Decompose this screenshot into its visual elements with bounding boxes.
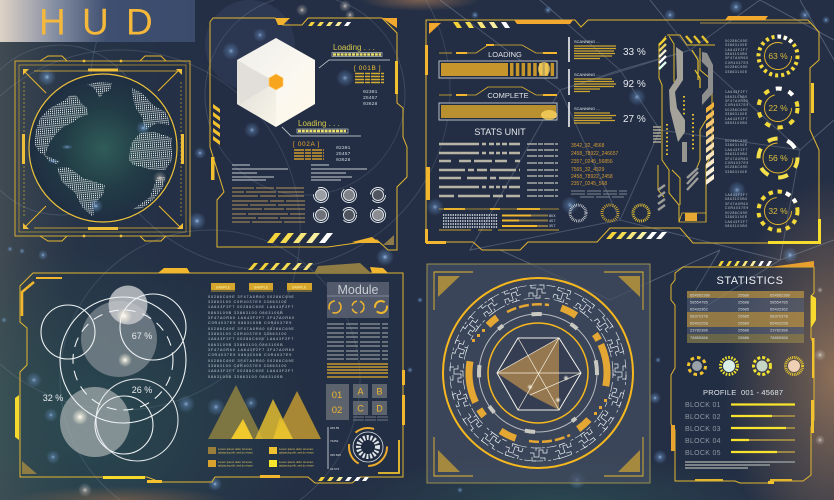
panel: globe	[15, 56, 190, 241]
code tiles	[326, 384, 388, 420]
table: 58372378	[770, 314, 789, 318]
gauge number columns: 00286C69E	[725, 65, 748, 69]
code list: 2357_0245_56856	[571, 159, 613, 165]
loading block bottom: [ 002A ]	[293, 141, 320, 148]
radial gauge: 345.55	[330, 426, 340, 430]
sample columns: 3F47A0R60 1A643F2F7 3F47A0R60	[208, 348, 295, 352]
scanning column: 33 %	[623, 47, 646, 58]
gauge 22%: 22 %	[768, 103, 788, 113]
title banner: HUD	[0, 0, 195, 42]
module box: Module	[338, 283, 379, 297]
gauge 63%: 63 %	[768, 51, 788, 61]
corner brackets	[434, 272, 643, 476]
table: 78855366	[770, 335, 789, 340]
code tiles: C	[357, 404, 364, 414]
small rings	[570, 205, 649, 221]
gauge number columns: 1A643F2F7	[725, 220, 748, 224]
sample columns: 33863100 C0R4037E9 33863100	[208, 364, 287, 368]
loading block top: [ 001B ]	[354, 65, 381, 72]
gauge number columns: 0863100B0	[725, 152, 748, 156]
sample columns: 0863100B 33863100 0863100B	[208, 311, 284, 315]
scanning column: 27 %	[623, 114, 646, 125]
sample columns: 3F47A0R60 1A643F2F7 3F47A0R60	[208, 316, 295, 320]
sample columns: 00286C69E 3F47A0R60 00286C69E	[208, 359, 295, 363]
frame	[671, 267, 814, 483]
gauge 56%: 56 %	[768, 153, 788, 163]
table: 25685	[738, 306, 750, 312]
table: 58372378	[690, 314, 709, 318]
gauge number columns: 33863100E	[725, 143, 748, 147]
code tiles: B	[376, 386, 383, 396]
sample columns: 0863100B 33863100 0863100B	[208, 343, 284, 347]
loading block top	[319, 43, 390, 107]
sample columns: C0R4037E9 0863100B C0R4037E9	[208, 353, 292, 357]
loading bar	[439, 44, 557, 78]
gauge number columns: 00286C69E	[725, 139, 748, 143]
hazard stripes	[308, 22, 351, 26]
profile: PROFILE 001 - 45687	[703, 388, 783, 397]
hexagon	[497, 338, 581, 410]
circuit graphic	[653, 35, 715, 222]
scanning column: SCANNING ...	[574, 106, 600, 111]
scanning column: SCANNING ...	[574, 72, 600, 77]
gauge number columns: 1A643F2F7	[725, 90, 748, 94]
gauge number columns: 3F47A0R60	[725, 56, 748, 60]
text lines	[232, 165, 367, 180]
gauge number columns: 00286C69E	[725, 211, 748, 215]
code tiles: 01	[332, 390, 342, 401]
code tiles: 02	[332, 405, 342, 416]
frame	[210, 18, 407, 250]
gauge number columns: 33863100E	[725, 112, 748, 116]
sample columns: 1A643F2F7 00286C69E 1A643F2F7	[208, 337, 294, 341]
code tiles: D	[376, 404, 383, 414]
globe frame	[15, 56, 190, 241]
legend: Lorem ipsum dolor sit amet,	[279, 460, 314, 464]
gauge number columns: 3F47A0R60	[725, 202, 748, 206]
scanning column: SCANNING ...	[574, 39, 600, 44]
gauge 56%	[751, 131, 805, 185]
loading block top: 25457	[363, 95, 378, 101]
venn diagram	[41, 286, 186, 461]
sample columns: SAMPLE	[254, 286, 269, 290]
stats rows	[439, 144, 558, 196]
code list: 3542_32_4568	[571, 143, 605, 149]
orange text lines	[232, 188, 305, 222]
table: 78855366	[690, 335, 709, 340]
scanning column: 92 %	[623, 79, 646, 90]
gauge number columns: 0863100B0	[725, 52, 748, 56]
radial gauge: 32.574	[330, 467, 340, 471]
radial gauge	[328, 426, 387, 471]
legend: Lorem ipsum dolor sit amet,	[218, 460, 253, 464]
legend	[208, 447, 315, 468]
sample columns: 00286C69E 3F47A0R60 00286C69E	[208, 295, 295, 299]
frame	[20, 273, 403, 483]
module text lines	[327, 324, 388, 377]
loading block bottom	[282, 119, 361, 163]
venn diagram: 32 %	[43, 393, 63, 403]
gauge number columns: 33863100E	[725, 170, 748, 174]
gauge number columns: 3F47A0R60	[725, 99, 748, 103]
table: 23782386	[770, 328, 789, 332]
table: 65432362	[690, 306, 709, 312]
gauge number columns: C0R4037E9	[725, 103, 749, 107]
triangle chart	[208, 385, 321, 439]
stats unit: STATS UNIT	[474, 127, 526, 137]
venn diagram: 67 %	[132, 331, 152, 341]
legend: adipiscing elit, sed do eiusm	[279, 450, 315, 454]
blocks	[685, 402, 795, 468]
gauge number columns: 33863100E	[725, 215, 748, 219]
table: 65402258	[690, 320, 709, 326]
loading block top: 02301	[363, 89, 378, 95]
table: 654562360	[690, 292, 711, 298]
legend: Lorem ipsum dolor sit amet,	[218, 447, 253, 451]
gauge number columns: 00286C69E	[725, 39, 748, 43]
code tiles: A	[357, 386, 364, 396]
gauge 63%	[758, 36, 798, 76]
table: 25689	[738, 292, 750, 298]
sample columns: 33863100 C0R4037E9 33863100	[208, 332, 287, 336]
loading block top: Loading . . .	[333, 43, 375, 52]
scanning column	[569, 37, 646, 127]
panel: venn circles and module	[15, 263, 405, 483]
code list: 2357_0245_568	[571, 181, 607, 187]
gauge number columns: 0863100B0	[725, 197, 748, 201]
small chart block: 457	[549, 220, 555, 224]
sample columns: SAMPLE	[292, 286, 307, 290]
rings	[443, 278, 633, 468]
gauge number columns: C0R4037E9	[725, 161, 749, 165]
blocks: BLOCK 04	[685, 438, 721, 445]
heading: STATISTICS	[717, 275, 783, 287]
gauge 22%	[757, 87, 799, 129]
sample columns: SAMPLE	[216, 286, 231, 290]
legend: adipiscing elit, sed do eiusm	[279, 464, 315, 468]
legend: adipiscing elit, sed do eiusm	[218, 464, 254, 468]
blocks: BLOCK 03	[685, 426, 721, 433]
panel: loading and stats	[425, 16, 821, 250]
table: 65432362	[770, 306, 789, 312]
table: 654562360	[770, 292, 791, 298]
table: 25689	[738, 320, 750, 326]
legend: adipiscing elit, sed do eiusm	[218, 450, 254, 454]
globe glints	[47, 121, 167, 213]
table	[687, 291, 804, 343]
panel: statistics	[671, 261, 816, 484]
venn diagram: 26 %	[132, 385, 152, 395]
sample columns	[208, 283, 312, 379]
loading block bottom: Loading . . .	[298, 119, 340, 128]
code list	[571, 143, 627, 197]
title banner: HUD: HUD	[39, 2, 153, 42]
gauge number columns: C0R4037E9	[725, 206, 749, 210]
gauge 32%	[752, 185, 804, 237]
frame	[426, 20, 819, 250]
loading bar: LOADING	[488, 50, 522, 59]
sample columns: C0R4037E9 0863100B C0R4037E9	[208, 321, 292, 325]
panel: cube and loading	[210, 18, 407, 250]
blocks: BLOCK 05	[685, 450, 721, 457]
code list: 2458_78922_246657	[571, 151, 618, 157]
gauge number columns: 0863100B0	[725, 224, 748, 228]
table: 25688	[738, 300, 750, 304]
sample columns: 00286C69E 3F47A0R60 00286C69E	[208, 327, 295, 331]
sample columns: 1A643F2F7 00286C69E 1A643F2F7	[208, 369, 294, 373]
round buttons	[316, 190, 384, 220]
blocks: BLOCK 01	[685, 402, 721, 409]
globe continents	[35, 82, 172, 217]
circuit traces ring	[450, 285, 626, 461]
gauge number columns: 33863100E	[725, 70, 748, 74]
table: 65402258	[770, 320, 789, 326]
table: 25686	[738, 335, 750, 340]
loading block bottom: 03628	[336, 157, 351, 163]
table: 25685	[738, 314, 750, 318]
gauge number columns: 1A643F2F7	[725, 48, 748, 52]
radial gauge: 74252	[330, 439, 339, 443]
sample columns: 1A643F2F7 00286C69E 1A643F2F7	[208, 305, 294, 309]
loading block bottom: 25457	[336, 151, 351, 157]
small chart block: BUX	[549, 215, 556, 219]
sample columns: 0863100B 33863100 0863100B	[208, 375, 284, 379]
gauge number columns: 00286C69E	[725, 108, 748, 112]
icon: white hexagonal cube	[237, 38, 315, 127]
small chart block: 357	[549, 225, 555, 229]
module box	[327, 282, 389, 318]
sample columns: 33863100 C0R4037E9 33863100	[208, 300, 287, 304]
radial gauge: 325.625	[330, 453, 341, 457]
gauge number columns: 3F47A0R60	[725, 157, 748, 161]
gauge number columns: 0863100B0	[725, 121, 748, 125]
panel: hexagon reactor	[427, 264, 650, 483]
loading block bottom: 02301	[336, 145, 351, 151]
complete bar: COMPLETE	[487, 91, 529, 100]
gauge number columns: 0863100B0	[725, 95, 748, 99]
code list: 7565_32_4329	[571, 167, 605, 173]
table: 58554785	[690, 300, 709, 304]
small chart block	[439, 208, 559, 230]
gauge number columns: 1A643F2F7	[725, 193, 748, 197]
gauge 32%: 32 %	[768, 206, 788, 216]
gauge number columns: 1A643F2F7	[725, 117, 748, 121]
table: 25686	[738, 328, 750, 332]
code list: 2458_78922_2458	[571, 174, 613, 180]
complete bar	[439, 87, 557, 120]
gauge number columns: 33863100E	[725, 43, 748, 47]
table: 58554785	[770, 300, 789, 304]
loading block top: 03628	[363, 101, 378, 107]
blocks: BLOCK 02	[685, 414, 721, 421]
gauge number columns: 1A643F2F7	[725, 148, 748, 152]
gauge number columns	[725, 39, 749, 228]
gauge number columns: C0R4037E9	[725, 61, 749, 65]
status dials	[688, 358, 802, 374]
table: 23782386	[690, 328, 709, 332]
legend: Lorem ipsum dolor sit amet,	[279, 447, 314, 451]
gauge number columns: 00286C69E	[725, 165, 748, 169]
globe circle	[29, 74, 177, 222]
